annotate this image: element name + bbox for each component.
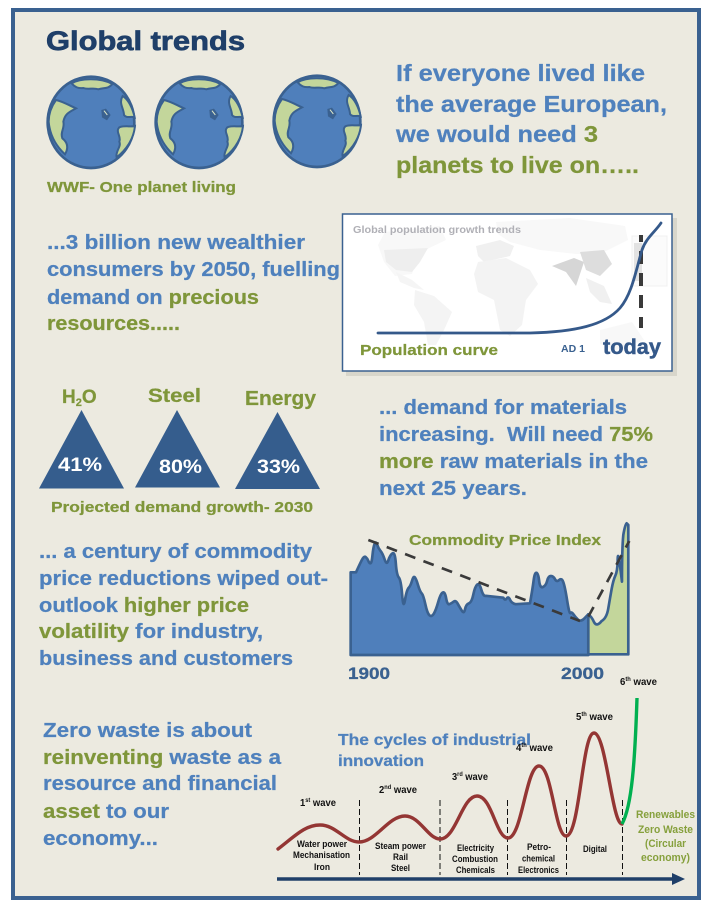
world map [378,218,667,350]
first wave technologies: Iron [314,862,330,872]
triangle: steel: 80% [159,457,202,478]
wave label 5: 5 [576,712,582,723]
text block: wealthier consumers: consumers by 2050, fuelling [47,259,340,281]
chart title: The cycles of industrial [338,732,531,749]
wave label 2: wave [391,785,417,796]
text block: commodity prices [39,541,328,670]
text block: wealthier consumers: demand on precious [47,287,259,309]
wave label 1: wave [310,798,336,809]
text block: raw materials [379,397,653,500]
sixth wave technologies: economy) [641,852,690,864]
text block: three planets: If everyone lived like [396,60,645,86]
axis label: 1900 [348,664,390,683]
wave label 3: rd [457,772,463,778]
green wave curve [622,698,637,824]
time arrow [277,873,685,885]
caption: projected demand: Projected demand growth- 2030 [51,500,313,516]
chart title: innovation [338,753,424,770]
wave dividers [360,800,622,875]
third wave technologies: Chemicals [456,865,495,875]
wave label 3: 3 [452,772,458,783]
text block: zero waste: reinventing waste as a [43,747,282,769]
text block: zero waste: resource and financial [43,773,277,795]
text block: raw materials: increasing. Will need 75% [379,424,653,446]
text block: raw materials: next 25 years. [379,478,527,500]
first wave technologies [293,839,350,872]
fourth wave technologies: Electronics [518,865,559,875]
second wave technologies: Rail [393,852,408,862]
icon: three globes [48,76,361,168]
wave label 6: 6 [620,677,626,688]
text block: commodity prices: ... a century of commodity [39,541,313,563]
wave label 6: wave [631,677,657,688]
text block: commodity prices: business and customers [39,648,293,670]
fourth wave technologies: Petro- [527,842,551,852]
second wave technologies: Steel [391,863,410,873]
second wave technologies: Steam power [375,841,426,851]
fourth wave technologies [518,842,559,875]
triangle: water: 2 [76,397,82,409]
fourth wave technologies: chemical [522,854,555,864]
title: Global trends [46,26,245,56]
sixth wave technologies: (Circular [645,838,687,850]
triangle: steel [135,386,220,488]
first wave technologies: Mechanisation [293,850,350,860]
third wave technologies: Combustion [452,854,498,864]
curve caption: Population curve [360,342,498,359]
wave label 1: 1 [300,798,306,809]
axis end: today [603,336,661,359]
text block: three planets: the average European, [396,91,667,117]
text block: zero waste: asset to our [43,801,169,823]
chart: commodity price index [348,523,629,683]
wave label 6: th [625,677,631,683]
axis label: 2000 [561,664,604,683]
wave label 4: th [521,743,527,749]
text block: wealthier consumers: resources..... [47,313,180,335]
text block: commodity prices: outlook higher price [39,595,249,617]
third wave technologies [452,843,498,875]
area: price rise [588,523,628,654]
sixth wave technologies: Renewables [636,809,695,821]
today marker [639,235,643,328]
third wave technologies: Electricity [457,843,494,853]
sixth wave technologies [636,809,695,864]
first wave technologies: Water power [297,839,347,849]
wave label 5: th [581,712,587,718]
fifth wave technology: Digital [583,844,607,854]
triangle: energy: 33% [257,457,300,478]
wave label 2: 2 [379,785,385,796]
text block: raw materials: more raw materials in the [379,451,648,473]
wave label 1: st [305,798,310,804]
wave label 4: 4 [516,743,522,754]
triangle: energy [235,388,320,489]
text block: zero waste: economy... [43,828,158,850]
wave label 2: nd [384,785,392,791]
red wave curve [278,733,622,849]
caption: WWF: WWF- One planet living [47,179,236,196]
panel: population chart [342,214,677,376]
text block: raw materials: ... demand for materials [379,397,627,419]
chart label: Global population growth trends [353,224,521,236]
triangle: energy: Energy [245,388,317,410]
triangle: water: 41% [58,455,102,476]
wave label 5: wave [587,712,613,723]
chart title: Commodity Price Index [409,532,602,549]
second wave technologies [375,841,426,873]
triangle: water: O [82,387,97,408]
population curve [378,223,661,333]
triangle: water [39,387,124,488]
text block: commodity prices: volatility for industry, [39,621,263,643]
text block: zero waste [43,720,282,850]
text block: zero waste: Zero waste is about [43,720,252,742]
area: price decline [351,543,588,655]
chart title [338,732,531,770]
text block: wealthier consumers: ...3 billion new wealthier [47,232,305,254]
axis start: AD 1 [561,344,585,355]
text block: three planets [395,60,667,178]
sixth wave technologies: Zero Waste [638,824,693,836]
text block: wealthier consumers [47,232,340,335]
text block: commodity prices: price reductions wiped out- [39,568,328,590]
wave label 4: wave [527,743,553,754]
trend lines [368,540,629,621]
wave label 3: wave [463,772,488,783]
text block: three planets: planets to live on….. [396,152,639,178]
triangle: water: H [62,387,76,408]
triangle: steel: Steel [148,386,201,407]
chart: cycles of industrial innovation [277,677,695,885]
text block: three planets: we would need 3 [395,121,598,147]
